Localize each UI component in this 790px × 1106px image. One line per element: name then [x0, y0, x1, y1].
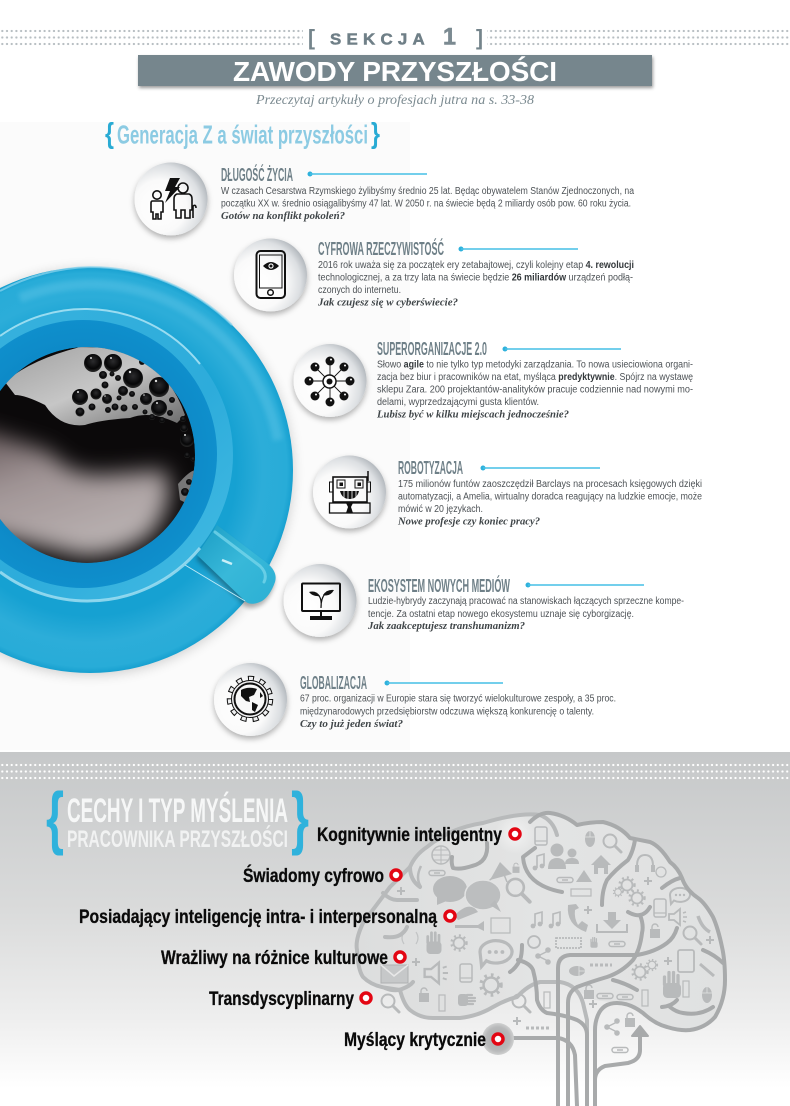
trait: transdyscyplinarny: Transdyscyplinarny: [209, 989, 354, 1010]
body text: [317, 260, 634, 308]
body text: Gotów na konflikt pokoleń?: [221, 211, 345, 222]
halo: top marker: [495, 814, 535, 854]
body text: mówić w 20 językach.: [398, 504, 483, 515]
item: robotyzacja: [313, 456, 702, 528]
body text: [300, 694, 616, 730]
cup interior: [0, 320, 217, 588]
item: długość życia: DŁUGOŚĆ ŻYCIA: [221, 164, 293, 185]
brain icons: [381, 827, 714, 1052]
body text: [376, 360, 693, 420]
body text: Słowo agile to nie tylko typ metodyki zarządzania. To nowa usieciowiona organi-: [377, 360, 693, 370]
section label band: [: [308, 25, 316, 50]
heading: Generacja Z: Generacja Z a świat przyszłości: [117, 120, 368, 150]
heading: Generacja Z: {: [105, 118, 114, 150]
coffee: [0, 347, 196, 563]
heading: cechy i typ myślenia: [46, 778, 309, 856]
heading: cechy i typ myślenia: CECHY I TYP MYŚLENIA: [67, 792, 288, 830]
brain outline and pathways: [357, 813, 725, 1106]
title bar: [138, 55, 652, 87]
body text: automatyzacji, a Amelia, wirtualny doradca reagujący na ludzkie emocje, może: [398, 492, 702, 502]
item: superorganizacje 2.0: SUPERORGANIZACJE 2.0: [377, 339, 487, 359]
accent line: [480, 466, 600, 470]
body text: Nowe profesje czy koniec pracy?: [397, 516, 540, 528]
body text: sklepu Zara. 200 projektantów-analityków pracuje codziennie nad nowymi mo-: [377, 384, 693, 396]
trait: kognitywnie inteligentny: Kognitywnie inteligentny: [317, 825, 502, 846]
body text: 2016 rok uważa się za początek ery zetabajtowej, czyli kolejny etap 4. rewolucji: [318, 260, 634, 271]
trait: inteligencja intra- i interpersonalna: Posiadający inteligencję intra- i interpersonalną: [79, 907, 437, 928]
cup handle: [185, 525, 276, 608]
heading: cechy i typ myślenia: {: [46, 778, 64, 856]
trait: świadomy cyfrowo: Świadomy cyfrowo: [243, 865, 384, 887]
body text: tencje. Za ostatni etap nowego ekosystemu uznaje się cyborgizację.: [368, 609, 634, 620]
body text: [397, 479, 702, 528]
body text: Czy to już jeden świat?: [300, 719, 403, 730]
heading: Generacja Z: [105, 118, 380, 150]
item: cyfrowa rzeczywistość: [234, 238, 634, 312]
item: długość życia: [134, 162, 634, 236]
body text: technologicznej, a za trzy lata na świecie będzie 26 miliardów urządzeń podłą-: [318, 272, 633, 284]
body text: Ludzie-hybrydy zaczynają pracować na stanowiskach łączących sprzeczne kompe-: [368, 596, 684, 607]
brain silhouette: [357, 813, 725, 1030]
body text: 175 milionów funtów zaoszczędził Barclays na procesach księgowych dzięki: [398, 479, 702, 490]
icon: monitor with plant: [284, 564, 356, 637]
body text: Jak zaakceptujesz transhumanizm?: [367, 621, 525, 632]
arrow head: [632, 1026, 648, 1036]
heading: EKOSYSTEM NOWYCH MEDIÓW: [368, 575, 510, 596]
body text: Lubisz być w kilku miejscach jednocześnie?: [376, 410, 569, 420]
body text: [367, 596, 684, 632]
saucer: [0, 267, 293, 675]
trait: wrażliwy na różnice kulturowe: Wrażliwy na różnice kulturowe: [161, 948, 388, 969]
heading: cechy i typ myślenia: PRACOWNIKA PRZYSZŁOŚCI: [67, 825, 288, 853]
accent line: [502, 346, 621, 352]
dotted band: lower section: [0, 762, 790, 782]
item: globalizacja: [214, 663, 616, 736]
body text: 67 proc. organizacji w Europie stara się tworzyć wielokulturowe zespoły, a 35 proc.: [300, 694, 616, 704]
accent line: [458, 246, 578, 252]
body text: Jak czujesz się w cyberświecie?: [317, 298, 458, 308]
section label band: SEKCJA: [330, 32, 430, 48]
body text: W czasach Cesarstwa Rzymskiego żylibyśmy średnio 25 lat. Będąc obywatelem Stanów Zjednoczonych, na: [221, 186, 634, 197]
heading: Generacja Z: }: [371, 118, 380, 150]
body text: [221, 186, 634, 222]
body text: międzynarodowych przedsiębiorstw odczuwa większą konkurencję o talenty.: [300, 706, 594, 718]
item: ekosystem nowych mediów: [284, 564, 684, 637]
section label band: 1: [443, 24, 456, 50]
section label band: ]: [476, 25, 483, 50]
icon: smartphone with eye: [234, 238, 307, 312]
title bar: ZAWODY PRZYSZŁOŚCI: [233, 56, 557, 87]
cup rim: [0, 309, 233, 601]
body text: początku XX w. średnio osiągalibyśmy 47 lat. W 2050 r. na świecie będą 2 miliardy osób pow. 60 roku życia.: [221, 198, 631, 210]
body text: delami, wyprzedzającymi gusta klientów.: [377, 397, 539, 408]
icon: globe in gear: [214, 663, 287, 736]
section label band: [0, 24, 790, 50]
subtitle: Przeczytaj artykuły o profesjach jutra na s. 33-38: [255, 93, 534, 108]
icon: generations: [134, 162, 208, 236]
icon: robot: [313, 456, 386, 528]
heading: CYFROWA RZECZYWISTOŚĆ: [318, 238, 444, 259]
body text: czonych do internetu.: [318, 285, 401, 296]
body text: zacja bez biur i pracowników na etat, myśląca predyktywnie. Spójrz na wystawę: [377, 372, 693, 383]
icon: lightning bolt: [165, 178, 180, 203]
item: superorganizacje 2.0: [294, 339, 693, 420]
trait: myślący krytycznie: [344, 1023, 514, 1055]
item: robotyzacja: ROBOTYZACJA: [398, 458, 463, 478]
accent line: [384, 680, 503, 686]
item: globalizacja: GLOBALIZACJA: [300, 673, 367, 693]
heading: cechy i typ myślenia: }: [291, 778, 309, 856]
brain illustration: [357, 813, 725, 1106]
accent line: [308, 172, 427, 176]
coffee cup illustration: [0, 267, 293, 675]
trait: myślący krytycznie: Myślący krytycznie: [344, 1030, 486, 1051]
icon: network: [294, 344, 366, 417]
accent line: [526, 582, 644, 588]
